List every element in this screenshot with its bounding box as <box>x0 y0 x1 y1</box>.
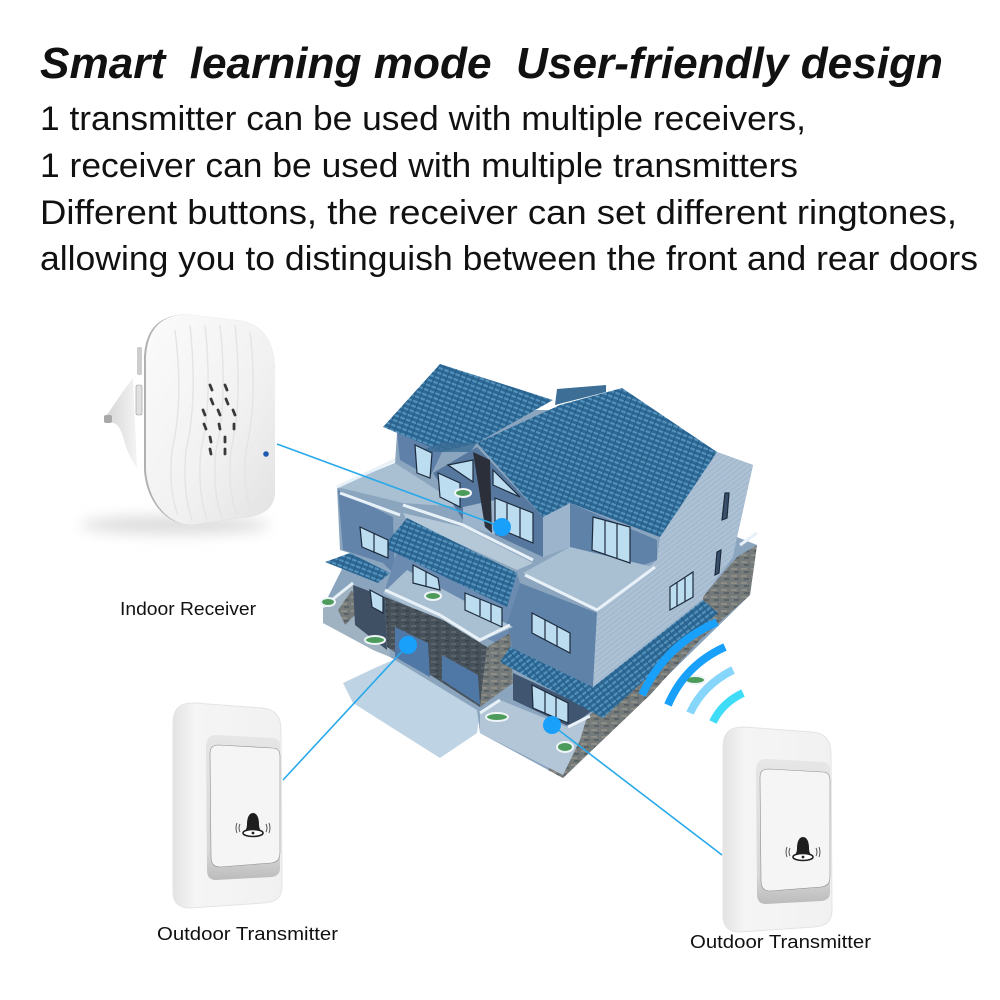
illustration: house <box>321 364 757 778</box>
railings <box>323 460 757 727</box>
text block: description: Different buttons, the receiver can set different ringtones, <box>40 194 957 232</box>
text block: description <box>40 100 978 278</box>
title: Smart learning mode User-friendly design <box>40 39 943 88</box>
label: outdoor transmitter right: Outdoor Transmitter <box>690 931 871 952</box>
signal waves <box>642 622 743 722</box>
location dots <box>399 518 561 734</box>
outdoor transmitter left <box>173 703 282 908</box>
label: indoor receiver: Indoor Receiver <box>120 598 256 619</box>
text block: description: 1 receiver can be used with multiple transmitters <box>40 147 798 185</box>
label: outdoor transmitter left: Outdoor Transmitter <box>157 923 338 944</box>
planters <box>321 489 705 752</box>
connector lines <box>277 444 722 855</box>
text block: description: allowing you to distinguish between the front and rear doors <box>40 240 978 278</box>
indoor receiver <box>80 314 275 534</box>
windows <box>360 445 729 723</box>
outdoor transmitter right <box>723 727 832 932</box>
text block: description: 1 transmitter can be used with multiple receivers, <box>40 100 806 138</box>
roofs <box>325 364 718 718</box>
garage doors <box>395 627 480 705</box>
